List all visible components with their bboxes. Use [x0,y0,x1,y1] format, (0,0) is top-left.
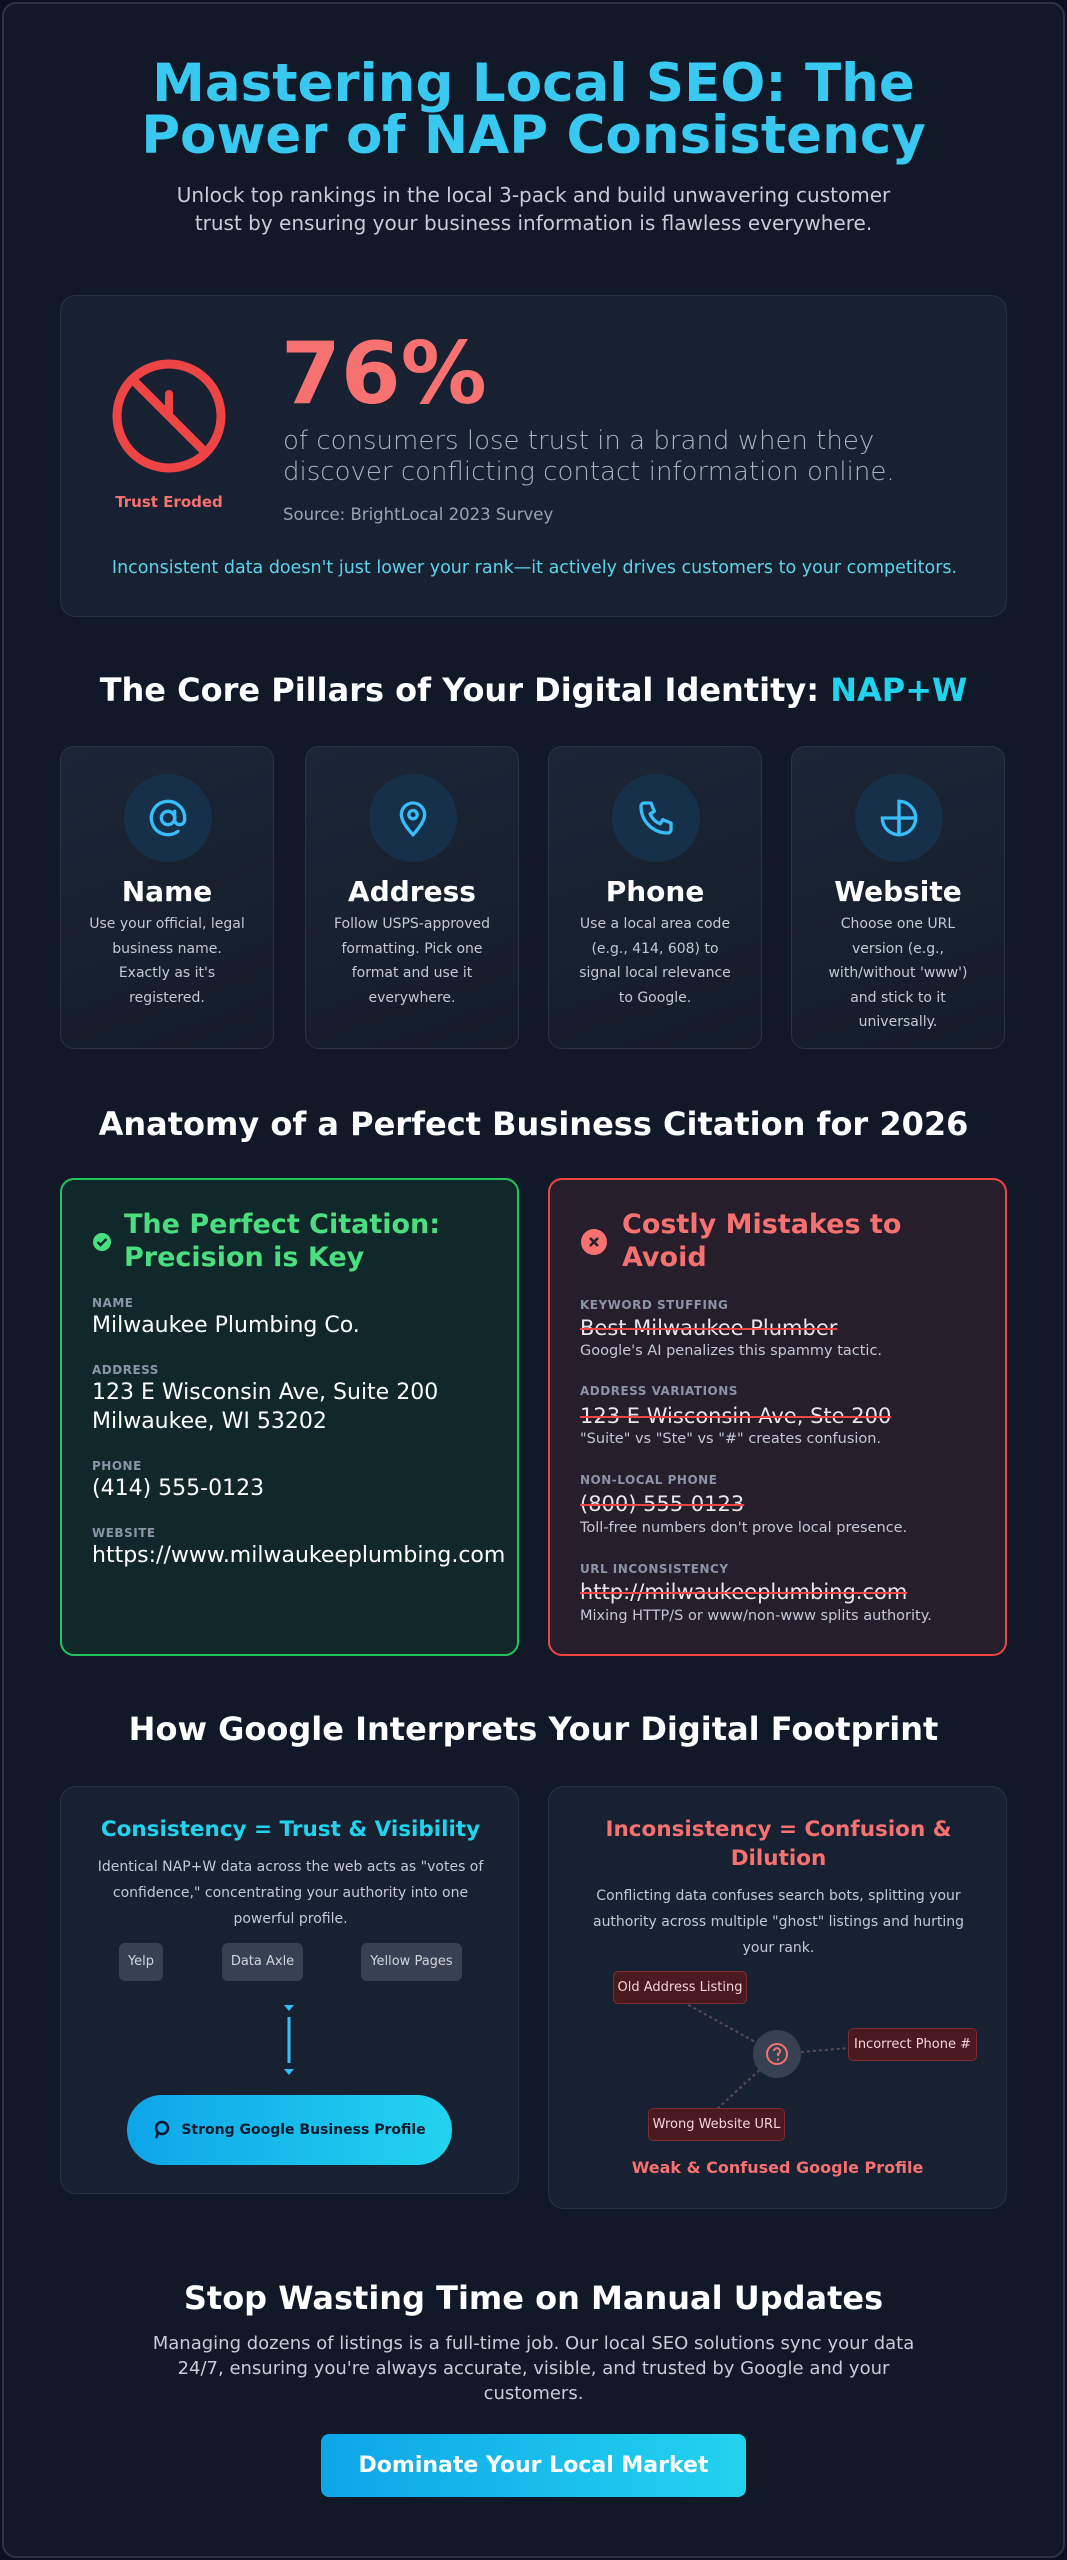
label: trust eroded: Trust Eroded [115,493,223,511]
panel: website: Choose one URL version (e.g., with/without 'www') and stick to it universally. [828,916,968,1030]
panel: consistency [60,1786,519,2194]
panel: consistency: Consistency = Trust & Visibility [101,1817,480,1842]
icon: x [581,1229,607,1255]
title [141,53,926,166]
panel: perfect citation: (414) 555-0123 [92,1476,264,1501]
panel: mistakes: URL INCONSISTENCY [580,1562,729,1576]
source: Source: BrightLocal 2023 Survey [283,505,553,524]
callout: Inconsistent data doesn't just lower your rank—it actively drives customers to your competitors. [112,558,957,578]
panel: name [60,746,274,1049]
heading: google: How Google Interprets Your Digital Footprint [129,1710,938,1748]
panel: perfect citation: ADDRESS [92,1363,159,1377]
button: Dominate Your Local Market [359,2453,708,2478]
chips: Yelp [128,1954,154,1969]
title: Mastering Local SEO: The [152,53,915,114]
panel: mistakes: Toll-free numbers don't prove local presence. [580,1520,907,1536]
panel: consistency: Identical NAP+W data across the web acts as "votes of confidence," concentrating your authority into one powerful profile. [98,1859,483,1927]
panel: address: Follow USPS-approved formatting. Pick one format and use it everywhere. [334,916,490,1006]
stat number: 76% [281,324,487,424]
panel: mistakes: "Suite" vs "Ste" vs "#" creates confusion. [580,1431,881,1447]
arrow [284,2005,294,2075]
panel: mistakes [548,1178,1007,1656]
tag: incorrect phone: Incorrect Phone # [854,2037,971,2052]
cta text: Managing dozens of listings is a full-time job. Our local SEO solutions sync your data 24/7, ensuring you're always accurate, visible, and trusted by Google and your customers. [153,2333,914,2404]
panel: name: Use your official, legal business name. Exactly as it's registered. [89,916,245,1006]
tag: wrong url: Wrong Website URL [653,2117,780,2132]
pill: strong profile: Strong Google Business Profile [181,2122,426,2138]
subtitle: Unlock top rankings in the local 3-pack and build unwavering customer trust by ensuring your business information is flawless everywhere. [177,183,890,235]
heading: Precision is Key [124,1242,364,1273]
panel: perfect citation: https://www.milwaukeeplumbing.com [92,1543,505,1568]
text: Yellow Pages [370,1954,453,1969]
panel: mistakes: 123 E Wisconsin Ave, Ste 200 [580,1404,891,1428]
panel: mistakes: ADDRESS VARIATIONS [580,1384,738,1398]
panel: address: Address [348,875,476,908]
chips [119,1943,163,1981]
panel: address [305,746,519,1049]
heading: Avoid [622,1242,707,1273]
panel: perfect citation: Milwaukee Plumbing Co. [92,1313,360,1338]
node: center [753,2030,801,2078]
diagram lines [684,2004,846,2108]
panel: mistakes: http://milwaukeeplumbing.com [580,1580,907,1604]
panel: perfect citation: Milwaukee, WI 53202 [92,1409,327,1434]
panel: perfect citation: PHONE [92,1459,142,1473]
panel: website [791,746,1005,1049]
panel: name: Name [122,875,212,908]
panel: mistakes: (800) 555-0123 [580,1492,744,1516]
text: Data Axle [231,1954,294,1969]
button [321,2434,746,2497]
title: Power of NAP Consistency [141,105,926,166]
heading: Costly Mistakes to [622,1209,901,1240]
heading: anatomy: Anatomy of a Perfect Business Citation for 2026 [99,1105,968,1143]
panel: phone: Use a local area code (e.g., 414, 608) to signal local relevance to Google. [579,916,731,1006]
tag: old address [613,1971,747,2004]
icon: check [93,1233,111,1251]
panel: stat [60,295,1007,617]
heading [124,1209,440,1273]
panel: inconsistency [548,1786,1007,2209]
panel: inconsistency: Inconsistency = Confusion & Dilution [606,1817,952,1871]
panel: mistakes: Google's AI penalizes this spammy tactic. [580,1343,882,1359]
panel: phone [548,746,762,1049]
panel: perfect citation [60,1178,519,1656]
panel: perfect citation: NAME [92,1296,133,1310]
heading: pillars: The Core Pillars of Your Digital Identity: NAP+W [100,671,967,709]
heading [622,1209,901,1273]
icon: trust eroded [112,360,226,472]
tag: incorrect phone [848,2028,977,2061]
stat description: of consumers lose trust in a brand when they discover conflicting contact information online. [283,426,895,487]
panel: mistakes: Best Milwaukee Plumber [580,1316,837,1340]
pill: strong profile [127,2095,452,2165]
heading: The Perfect Citation: [124,1209,440,1240]
panel: mistakes: KEYWORD STUFFING [580,1298,728,1312]
tag: old address: Old Address Listing [618,1980,742,1995]
heading: cta: Stop Wasting Time on Manual Updates [184,2279,883,2317]
tag: wrong url [648,2108,785,2141]
panel: mistakes: Mixing HTTP/S or www/non-www splits authority. [580,1608,932,1624]
panel: phone: Phone [606,875,704,908]
panel: inconsistency: Conflicting data confuses search bots, splitting your authority across multiple "ghost" listings and hurting your rank. [593,1888,964,1956]
panel: mistakes: NON-LOCAL PHONE [580,1473,717,1487]
panel: perfect citation: WEBSITE [92,1526,156,1540]
label: weak profile: Weak & Confused Google Profile [632,2158,923,2177]
panel: website: Website [834,875,962,908]
panel: perfect citation: 123 E Wisconsin Ave, Suite 200 [92,1380,438,1405]
